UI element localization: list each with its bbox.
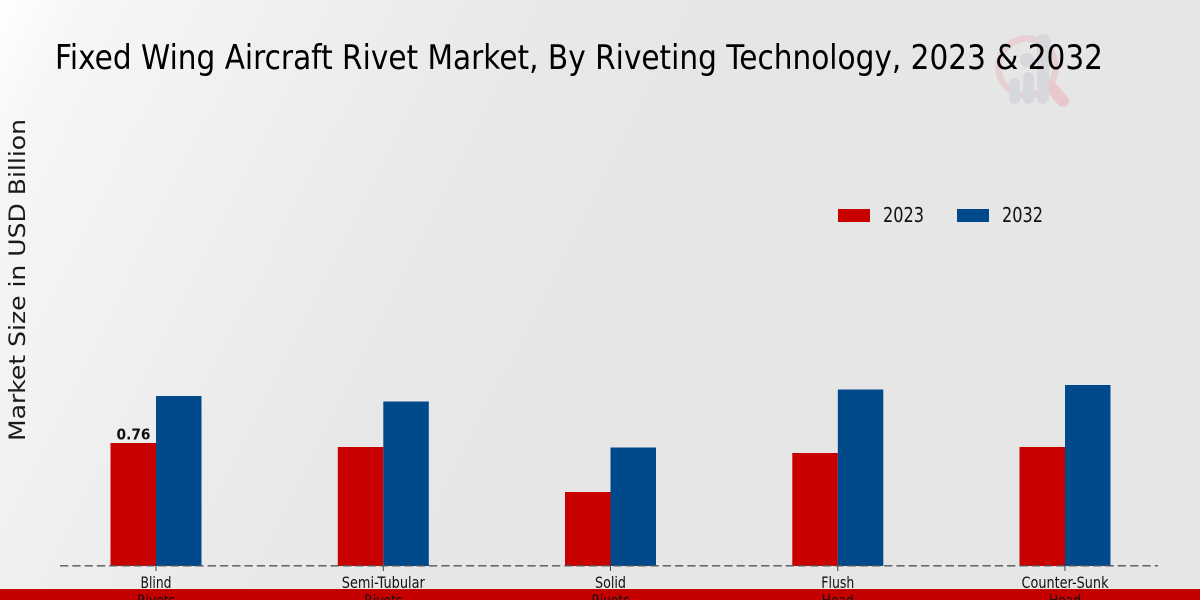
- bars: Counter-Sunk Head: [1020, 385, 1110, 566]
- x axis labels: Flush: [821, 573, 854, 592]
- legend item: 2032: 2032: [1002, 203, 1043, 227]
- legend: [838, 203, 1043, 227]
- x axis baseline: [60, 565, 1158, 567]
- bars: Blind Rivets: [110, 396, 202, 566]
- bars: Flush Head: [792, 390, 883, 566]
- bars: Semi-Tubular Rivets: [338, 402, 429, 566]
- legend item: 2023: [838, 203, 924, 227]
- x axis labels: [140, 573, 1109, 592]
- icon: watermark logo: [998, 34, 1063, 104]
- x axis labels: Blind: [140, 573, 172, 592]
- footer bar: [0, 589, 1200, 600]
- legend item: 2032: [957, 203, 1043, 227]
- x axis labels: Solid: [595, 573, 626, 592]
- x axis labels: Semi-Tubular: [342, 573, 425, 592]
- data label: 0.76: 0.76: [116, 426, 150, 444]
- x axis labels: Counter-Sunk: [1022, 573, 1109, 592]
- legend item: 2023: 2023: [883, 203, 924, 227]
- x axis label second lines clipped by page edge: [137, 591, 1081, 600]
- bar chart: [110, 385, 1110, 566]
- y axis label: Market Size in USD Billion: [5, 119, 31, 441]
- bars: Solid Rivets: [565, 448, 656, 566]
